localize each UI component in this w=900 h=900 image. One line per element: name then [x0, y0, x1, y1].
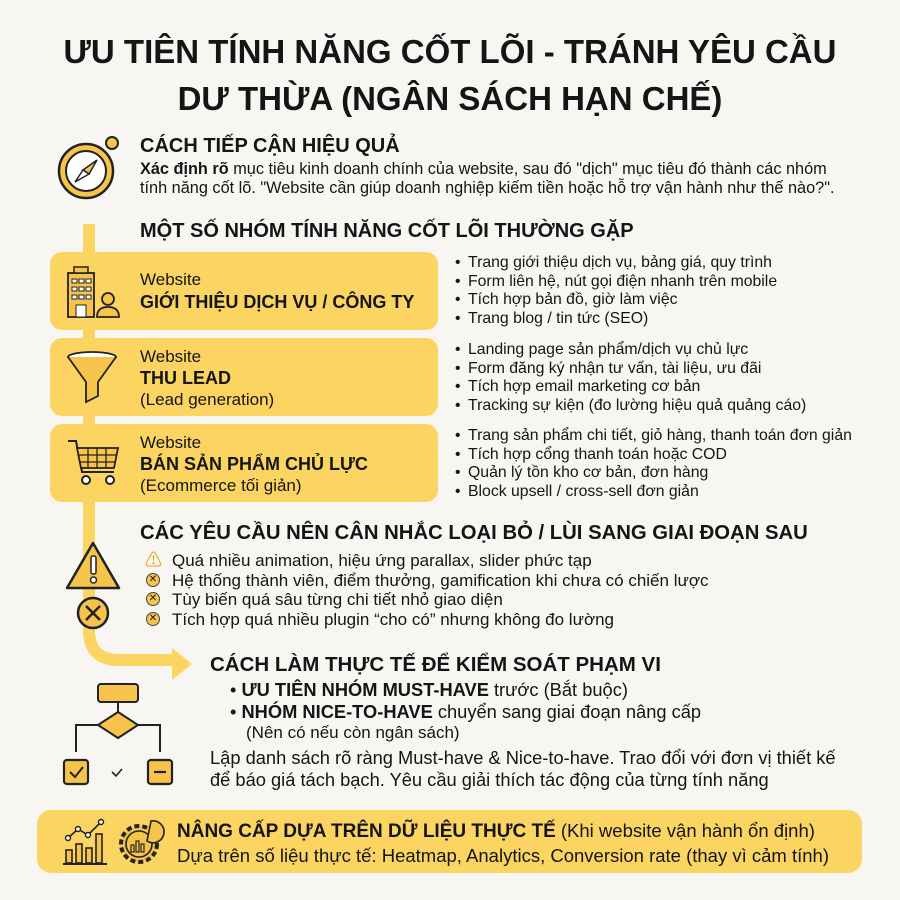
panel: ecommerce website: (Ecommerce tối giản)	[140, 476, 302, 495]
section: features to remove: ✕	[149, 613, 157, 624]
section: features to remove	[140, 520, 808, 628]
section: scope control: • NHÓM NICE-TO-HAVE chuyển sang giai đoạn nâng cấp	[230, 701, 701, 722]
section: features to remove: ✕	[149, 593, 157, 604]
list: lead features: Tracking sự kiện (đo lường hiệu quả quảng cáo)	[468, 397, 806, 414]
section: approach: Xác định rõ mục tiêu kinh doanh chính của website, sau đó "dịch" mục tiêu đó thành các nhóm	[140, 160, 827, 178]
section: features to remove: Tùy biến quá sâu từng chi tiết nhỏ giao diện	[172, 590, 503, 609]
panel: ecommerce website: Website	[140, 433, 201, 452]
section: scope control: • ƯU TIÊN NHÓM MUST-HAVE trước (Bắt buộc)	[230, 679, 628, 700]
panel: service website: Website	[140, 270, 201, 289]
list: service features: Trang blog / tin tức (SEO)	[468, 310, 648, 327]
panel: lead website: (Lead generation)	[140, 390, 274, 409]
list: service features: Form liên hệ, nút gọi điện nhanh trên mobile	[468, 273, 777, 290]
section: approach: tính năng cốt lõ. "Website cần giúp doanh nghiệp kiếm tiền hoặc hỗ trợ vận hành như thế nào?".	[140, 179, 835, 197]
icon: compass	[58, 136, 119, 200]
heading: core feature groups: MỘT SỐ NHÓM TÍNH NĂNG CỐT LÕI THƯỜNG GẶP	[140, 220, 634, 242]
section: scope control: Lập danh sách rõ ràng Must-have & Nice-to-have. Trao đổi với đơn vị thiết kế	[210, 747, 836, 768]
panel: lead website: Website	[140, 347, 201, 366]
section: features to remove: Tích hợp quá nhiều plugin “cho có” nhưng không đo lường	[172, 610, 614, 628]
panel: service website: GIỚI THIỆU DỊCH VỤ / CÔNG TY	[140, 292, 414, 312]
section: approach: CÁCH TIẾP CẬN HIỆU QUẢ	[140, 135, 400, 157]
banner: data-driven upgrade: Dựa trên số liệu thực tế: Heatmap, Analytics, Conversion rate (thay vì cảm tính)	[177, 845, 829, 866]
panel: ecommerce website	[50, 424, 438, 502]
list: ecommerce features: Block upsell / cross-sell đơn giản	[468, 483, 699, 500]
title: DƯ THỪA (NGÂN SÁCH HẠN CHẾ)	[178, 80, 722, 117]
list: lead features: Landing page sản phẩm/dịch vụ chủ lực	[468, 341, 748, 358]
panel: service website	[50, 252, 438, 330]
section: scope control: để báo giá tách bạch. Yêu cầu giải thích tác động của từng tính năng	[210, 769, 769, 790]
list: service features: Tích hợp bản đồ, giờ làm việc	[468, 291, 678, 308]
list: lead features: Form đăng ký nhận tư vấn, tài liệu, ưu đãi	[468, 360, 761, 377]
banner: data-driven upgrade	[37, 810, 862, 873]
list: ecommerce features: Tích hợp cổng thanh toán hoặc COD	[468, 446, 727, 463]
section: scope control	[210, 652, 836, 790]
panel: lead website	[50, 338, 438, 416]
list: lead features: Tích hợp email marketing cơ bản	[468, 378, 700, 395]
list: lead features	[456, 341, 806, 414]
list: ecommerce features	[456, 427, 852, 500]
section: approach	[140, 134, 835, 197]
panel: ecommerce website: BÁN SẢN PHẨM CHỦ LỰC	[140, 454, 368, 474]
list: service features	[456, 254, 777, 327]
list: ecommerce features: Trang sản phẩm chi tiết, giỏ hàng, thanh toán đơn giản	[468, 427, 852, 444]
title: ƯU TIÊN TÍNH NĂNG CỐT LÕI - TRÁNH YÊU CẦU	[64, 33, 836, 70]
section: features to remove: Quá nhiều animation, hiệu ứng parallax, slider phức tạp	[172, 551, 592, 570]
icon: warning and cancel	[66, 542, 120, 630]
icon: gear	[119, 820, 165, 864]
panel: lead website: THU LEAD	[140, 368, 231, 388]
list: service features: Trang giới thiệu dịch vụ, bảng giá, quy trình	[468, 254, 772, 271]
icon: flowchart	[62, 683, 174, 786]
banner: data-driven upgrade: NÂNG CẤP DỰA TRÊN DỮ LIỆU THỰC TẾ (Khi website vận hành ổn định)	[177, 820, 815, 842]
section: features to remove: ✕	[149, 574, 157, 585]
icon: chart	[63, 818, 107, 865]
list: ecommerce features: Quản lý tồn kho cơ bản, đơn hàng	[468, 464, 708, 481]
section: features to remove: Hệ thống thành viên, điểm thưởng, gamification khi chưa có chiến lược	[172, 570, 708, 590]
section: features to remove: CÁC YÊU CẦU NÊN CÂN NHẮC LOẠI BỎ / LÙI SANG GIAI ĐOẠN SAU	[140, 522, 808, 544]
section: scope control: (Nên có nếu còn ngân sách)	[246, 723, 460, 742]
section: scope control: CÁCH LÀM THỰC TẾ ĐỂ KIỂM SOÁT PHẠM VI	[210, 653, 661, 676]
title	[64, 33, 836, 117]
section: features to remove: ⚠	[145, 551, 162, 570]
